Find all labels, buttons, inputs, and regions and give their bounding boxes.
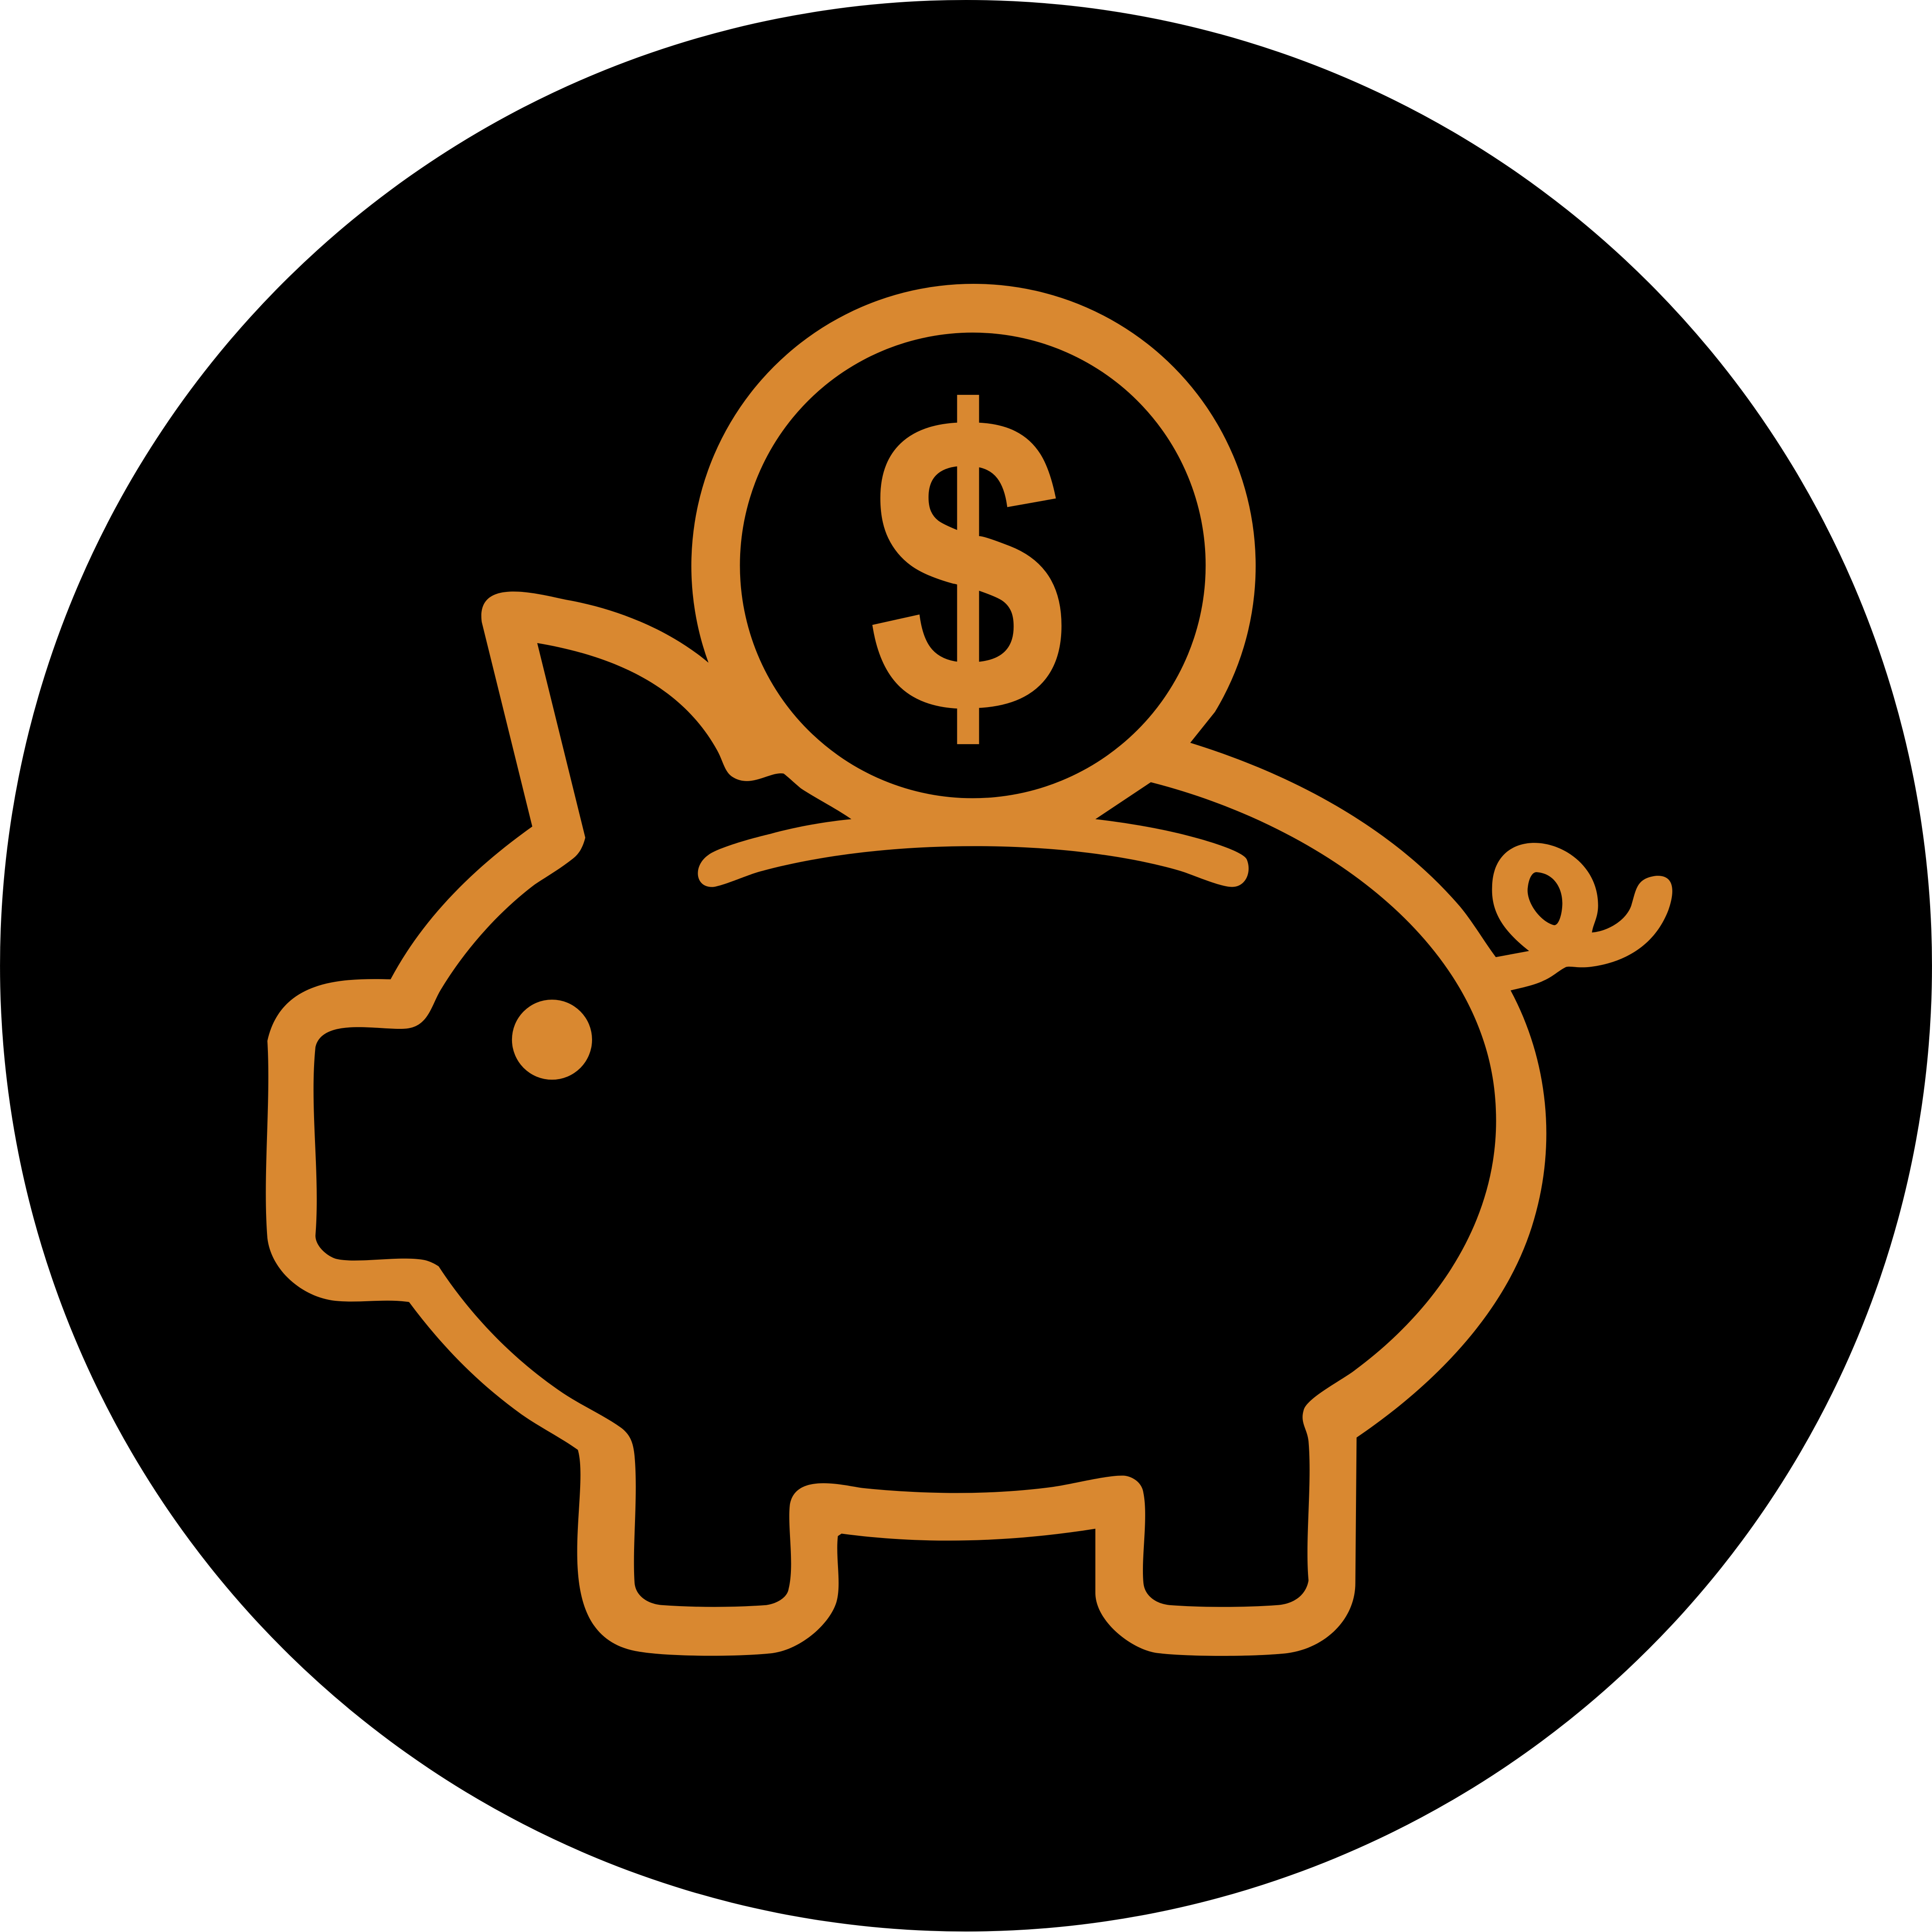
icon: piggy bank with coin <box>266 284 1672 1656</box>
dollar sign: $ <box>870 328 1065 801</box>
pig body outline with coin ring, slot and tail <box>266 284 1672 1656</box>
coin inner face <box>740 333 1206 798</box>
pig eye <box>512 1000 592 1080</box>
